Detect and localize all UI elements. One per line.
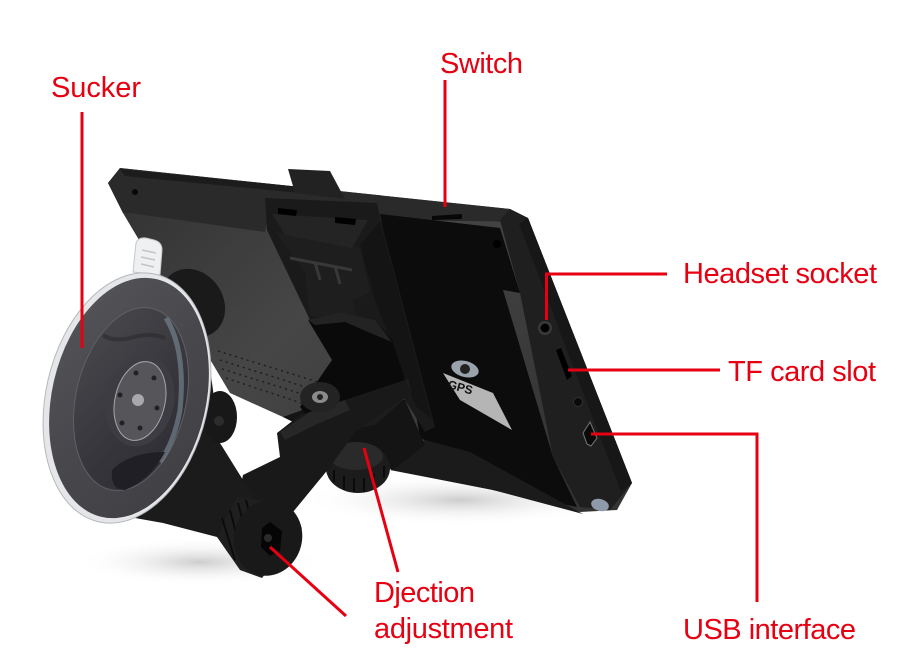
leader line: USB interface [591,434,757,602]
leader line: switch [444,80,446,207]
cup inner ring [56,296,206,502]
side screw hole [493,240,501,248]
label: Switch: Switch [440,48,523,80]
label: Djection adjustment [374,577,513,645]
adjustment knob rear [326,442,390,493]
label: Djection adjustment: Djection [374,577,475,609]
product label [443,358,512,430]
cup hub [97,349,183,453]
front knob [217,492,311,584]
hub screws [118,370,160,430]
hub center [132,394,144,406]
cup disc [27,262,231,534]
label: Headset socket: Headset socket [683,258,877,290]
cradle ball joint [300,382,340,412]
bottom sticker [590,497,610,513]
USB port [583,422,597,446]
lower back step [390,440,583,514]
top clip [288,169,345,199]
switch [432,214,462,220]
headset socket [538,321,552,335]
device body [108,168,632,512]
speaker dots [218,351,318,408]
cradle [300,312,407,433]
mount arm [240,380,412,515]
corner screw hole [132,189,138,195]
bracket slots [278,208,297,216]
product label: GPS [446,377,474,397]
label: Sucker: Sucker [51,72,141,104]
small round port [574,398,582,406]
suction mount base [135,256,262,550]
leader line: headset socket [546,274,667,320]
cup highlight [160,318,181,462]
mount bracket [265,169,435,433]
leader line: adjustment [270,547,346,616]
side edge [500,209,632,510]
leader line: djection [364,448,398,572]
bracket plate [265,198,435,432]
leader line: TF card slot [568,368,720,372]
latch teeth [290,258,352,284]
cup top fold [103,335,165,339]
leader line: sucker [80,112,84,348]
label: TF card slot: TF card slot [728,356,876,388]
label: Djection adjustment: adjustment [374,613,513,645]
ground shadow [75,474,620,586]
cup rim [20,256,234,540]
top bezel [108,168,530,232]
cup dark fold [112,452,165,490]
suction cup [20,238,234,540]
black back panel [380,214,577,507]
GPS device [108,168,632,514]
label: USB interface: USB interface [683,614,856,646]
TF card slot [556,348,572,380]
cup tab [133,238,162,275]
